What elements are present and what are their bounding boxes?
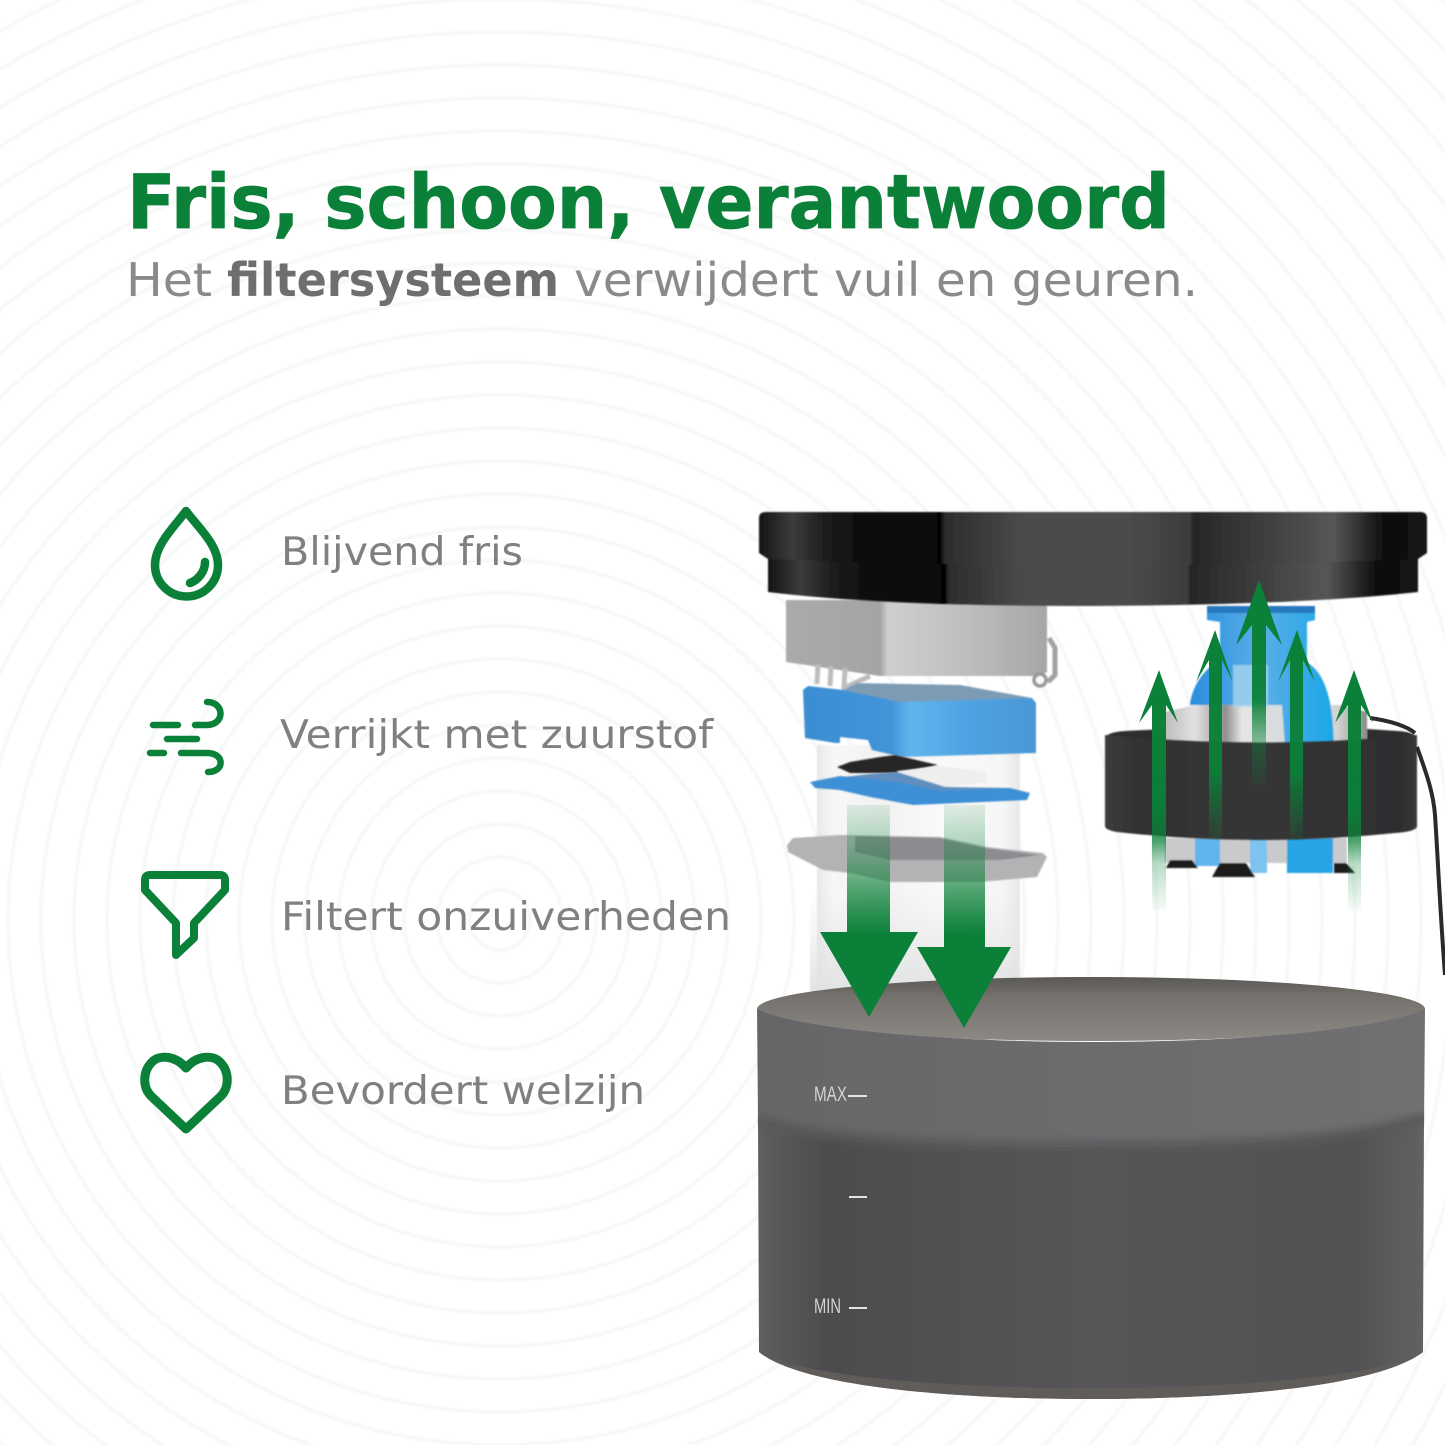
arrow: down left (820, 805, 918, 1017)
water line shade (758, 1117, 1424, 1146)
title: Fris, schoon, verantwoord (127, 158, 1170, 246)
bowl upper wall (757, 1009, 1425, 1147)
icon: wind (150, 702, 221, 772)
subtitle (126, 253, 1198, 307)
product: pump base and feet (1165, 838, 1355, 877)
feature label: fresh: Blijvend fris (281, 530, 523, 575)
subtitle: Het (126, 253, 212, 307)
scale mark: middle (849, 1196, 867, 1198)
product: water column (810, 745, 1020, 1000)
product: white filter pad (897, 766, 987, 787)
icon: water drop (155, 511, 218, 596)
arrow: up far right (1335, 670, 1373, 910)
bowl foot shade (759, 1352, 1423, 1399)
arrows: upward flow (1139, 580, 1373, 910)
scale label: MAX: MAX (814, 1083, 847, 1106)
feature label: oxygen: Verrijkt met zuurstof (280, 713, 714, 758)
product: water bowl (757, 977, 1425, 1399)
product: blue filter cartridge (803, 683, 1036, 757)
icon: heart (145, 1057, 227, 1129)
bowl lower wall with water (758, 1115, 1424, 1399)
subtitle: filtersysteem (227, 253, 559, 307)
feature label: wellbeing: Bevordert welzijn (281, 1069, 645, 1114)
arrow: up center (1236, 580, 1282, 785)
feature label: filter: Filtert onzuiverheden (281, 895, 731, 940)
arrow: up far left (1139, 670, 1178, 910)
product: power cord (1370, 718, 1445, 975)
product: carbon granules (837, 755, 938, 773)
product: foam sponge ring (1105, 729, 1417, 840)
bowl inner wall (757, 977, 1425, 1041)
arrow: up inner right (1278, 630, 1315, 840)
product: grey bottom plate (787, 835, 1047, 882)
arrow: down right (917, 805, 1011, 1028)
product: lid (759, 512, 1427, 606)
product: pump motor (1165, 606, 1367, 745)
product: blue filter plate (810, 772, 1030, 805)
icon: funnel (145, 875, 225, 955)
scale label: MIN: MIN (814, 1295, 841, 1318)
product: grey filter housing (786, 600, 1055, 688)
arrow: up inner left (1196, 630, 1233, 840)
subtitle: verwijdert vuil en geuren. (574, 253, 1198, 307)
